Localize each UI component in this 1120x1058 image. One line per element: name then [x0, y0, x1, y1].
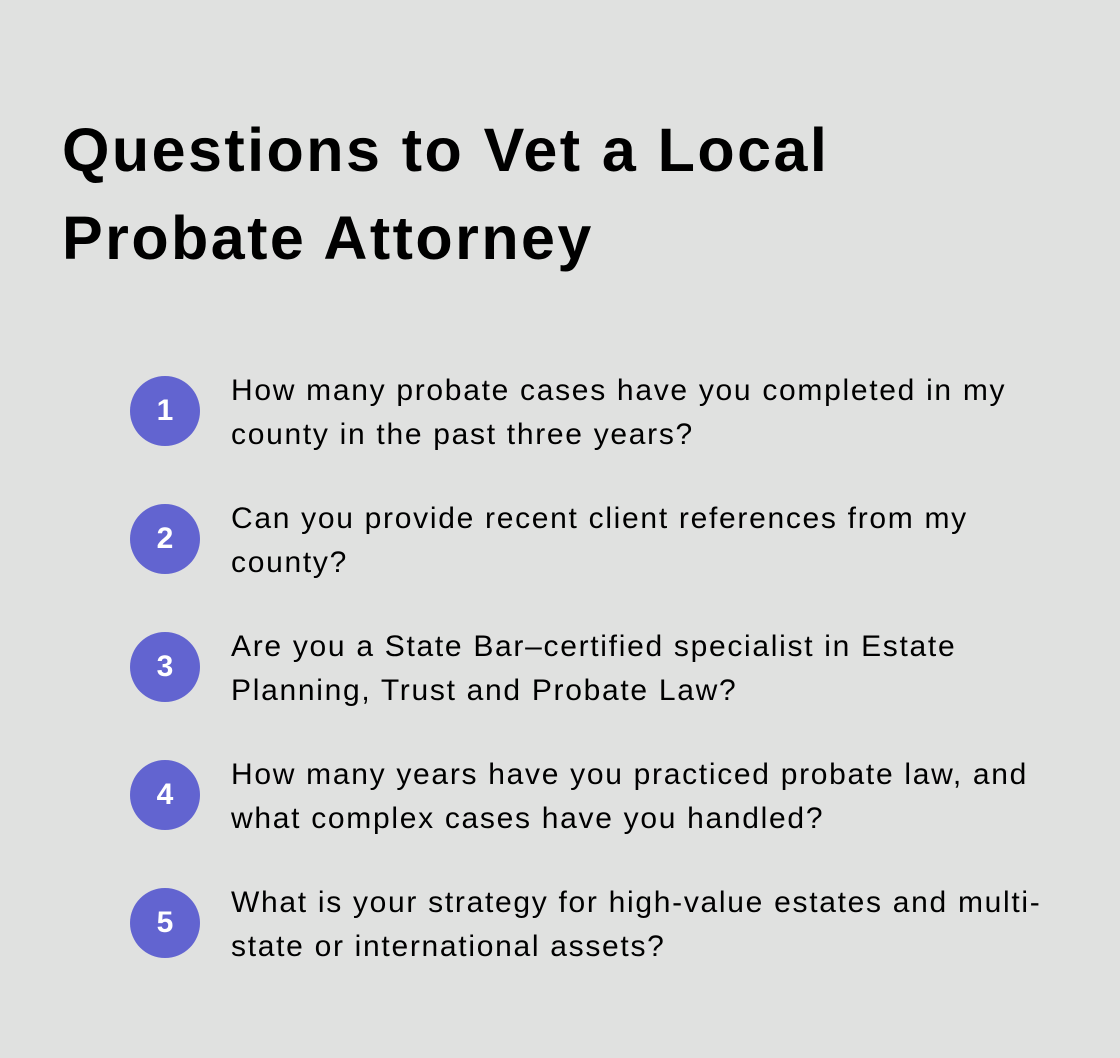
item 1: How many probate cases have you completed in my: [231, 374, 1006, 407]
item 4: How many years have you practiced probate law, and: [231, 758, 1028, 791]
item 5: [130, 886, 1041, 963]
item 3: 3: [157, 650, 173, 683]
item 2: county?: [231, 546, 348, 579]
title: Questions to Vet a Local: [62, 116, 829, 184]
item 3: [130, 630, 956, 707]
item 4: what complex cases have you handled?: [231, 802, 824, 835]
item 3: Planning, Trust and Probate Law?: [231, 674, 737, 707]
item 1: county in the past three years?: [231, 418, 694, 451]
item 5: What is your strategy for high-value estates and multi-: [231, 886, 1041, 919]
item 4: [130, 758, 1028, 835]
title: Probate Attorney: [62, 204, 594, 272]
item 2: Can you provide recent client references from my: [231, 502, 968, 535]
item 1: 1: [157, 394, 173, 427]
title: [62, 116, 829, 272]
item 4: 4: [157, 778, 173, 811]
item 3: Are you a State Bar–certified specialist in Estate: [231, 630, 956, 663]
item 2: [130, 502, 968, 579]
item 5: 5: [157, 906, 173, 939]
item 2: 2: [157, 522, 173, 555]
item 1: [130, 374, 1006, 451]
item 5: state or international assets?: [231, 930, 666, 963]
